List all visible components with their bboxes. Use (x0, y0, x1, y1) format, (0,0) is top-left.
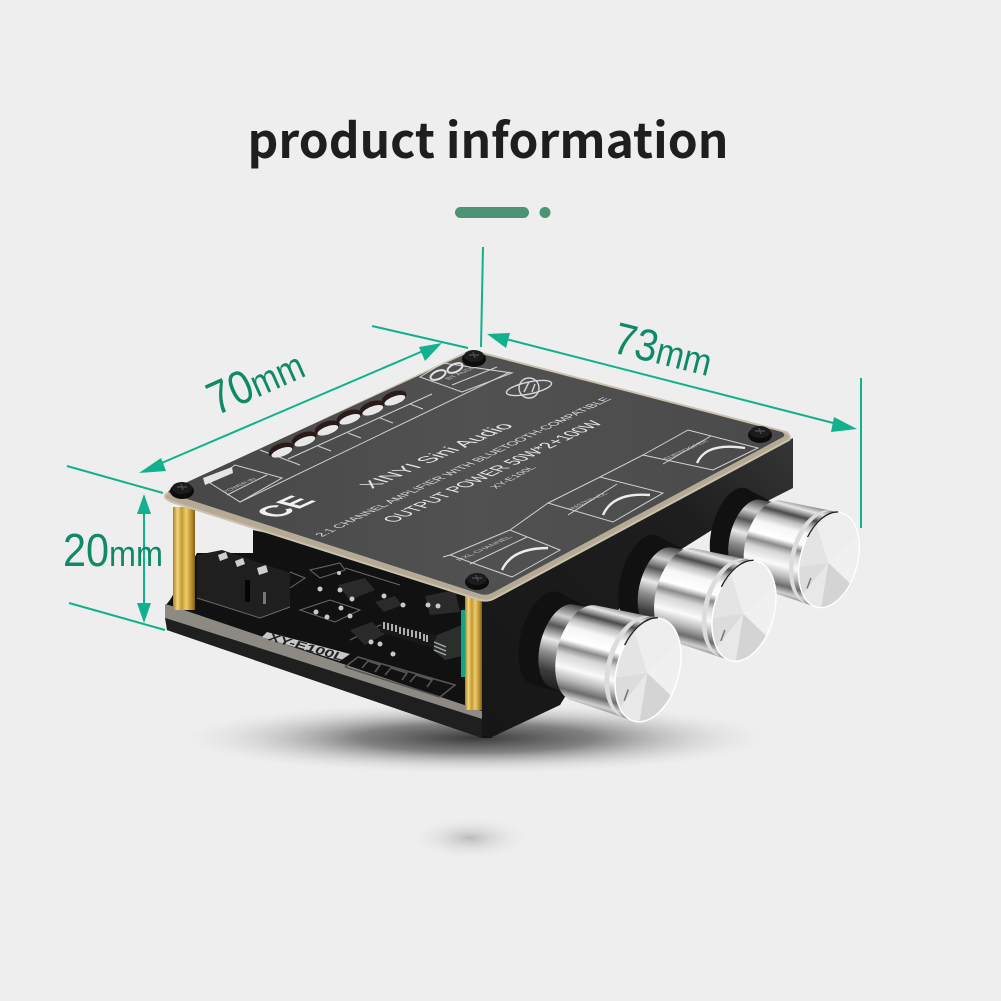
plate text: channel description: 2.1 CHANNEL AMPLIFIER WITH BLUETOOTH-COMPATIBLE (311, 396, 615, 538)
dimension: 70mm arrow (67, 326, 468, 493)
dimension: 73mm arrow (481, 247, 861, 528)
knob: master (605, 522, 797, 677)
knob label arcs (502, 447, 745, 570)
model label on board: XY-E100L (266, 631, 346, 664)
screw: top (462, 350, 486, 367)
floor shadow (181, 702, 771, 774)
circuit board (165, 530, 492, 738)
knob: channel (505, 578, 702, 738)
small board components (338, 578, 460, 645)
top plate edge (165, 351, 790, 601)
small labels: BT AUDIO (444, 364, 482, 380)
solder holes (267, 387, 408, 461)
small labels (221, 364, 711, 561)
power icon (203, 467, 233, 485)
reflection shadow (408, 816, 532, 860)
small labels: POWER IN (221, 478, 259, 493)
plate text: output power: OUTPUT POWER 50W*2+100W (378, 419, 608, 524)
inductor (433, 625, 462, 660)
small labels: RXL CHANNEL (455, 536, 515, 561)
dimension: 70mm label: 70mm (199, 336, 311, 425)
small labels: SUBWOOFER (662, 440, 711, 460)
dimension: 20mm arrow (69, 494, 165, 630)
terminal block (197, 550, 290, 618)
board traces and pads (197, 563, 415, 640)
screw: bottom (465, 573, 489, 590)
model label on board (262, 631, 350, 664)
chip (380, 620, 440, 650)
title accent bar (455, 207, 550, 218)
right side panel (482, 438, 793, 738)
dimension: 20mm label: 20mm (63, 524, 163, 576)
plate panel lines (210, 363, 758, 577)
bluetooth icon (429, 361, 464, 382)
teal sliver (461, 610, 465, 677)
infographic canvas (65, 119, 862, 851)
plate text: XINYI Sini Audio: XINYI Sini Audio (355, 421, 520, 490)
title: product information (248, 102, 728, 172)
CE mark: CE (245, 492, 325, 521)
brand logo (505, 377, 553, 399)
plate text: model: XY-E100L (488, 465, 540, 490)
brass standoff left (173, 507, 195, 610)
screw: right (748, 426, 772, 443)
knob: subwoofer (697, 475, 879, 623)
small labels: MASTER VOL (567, 492, 610, 510)
board edge (165, 604, 482, 719)
screw: left (170, 482, 194, 499)
brass standoff right (465, 595, 482, 710)
top plate (168, 352, 784, 595)
bluetooth antenna trace (345, 657, 455, 697)
dimension: 73mm label: 73mm (609, 312, 718, 386)
